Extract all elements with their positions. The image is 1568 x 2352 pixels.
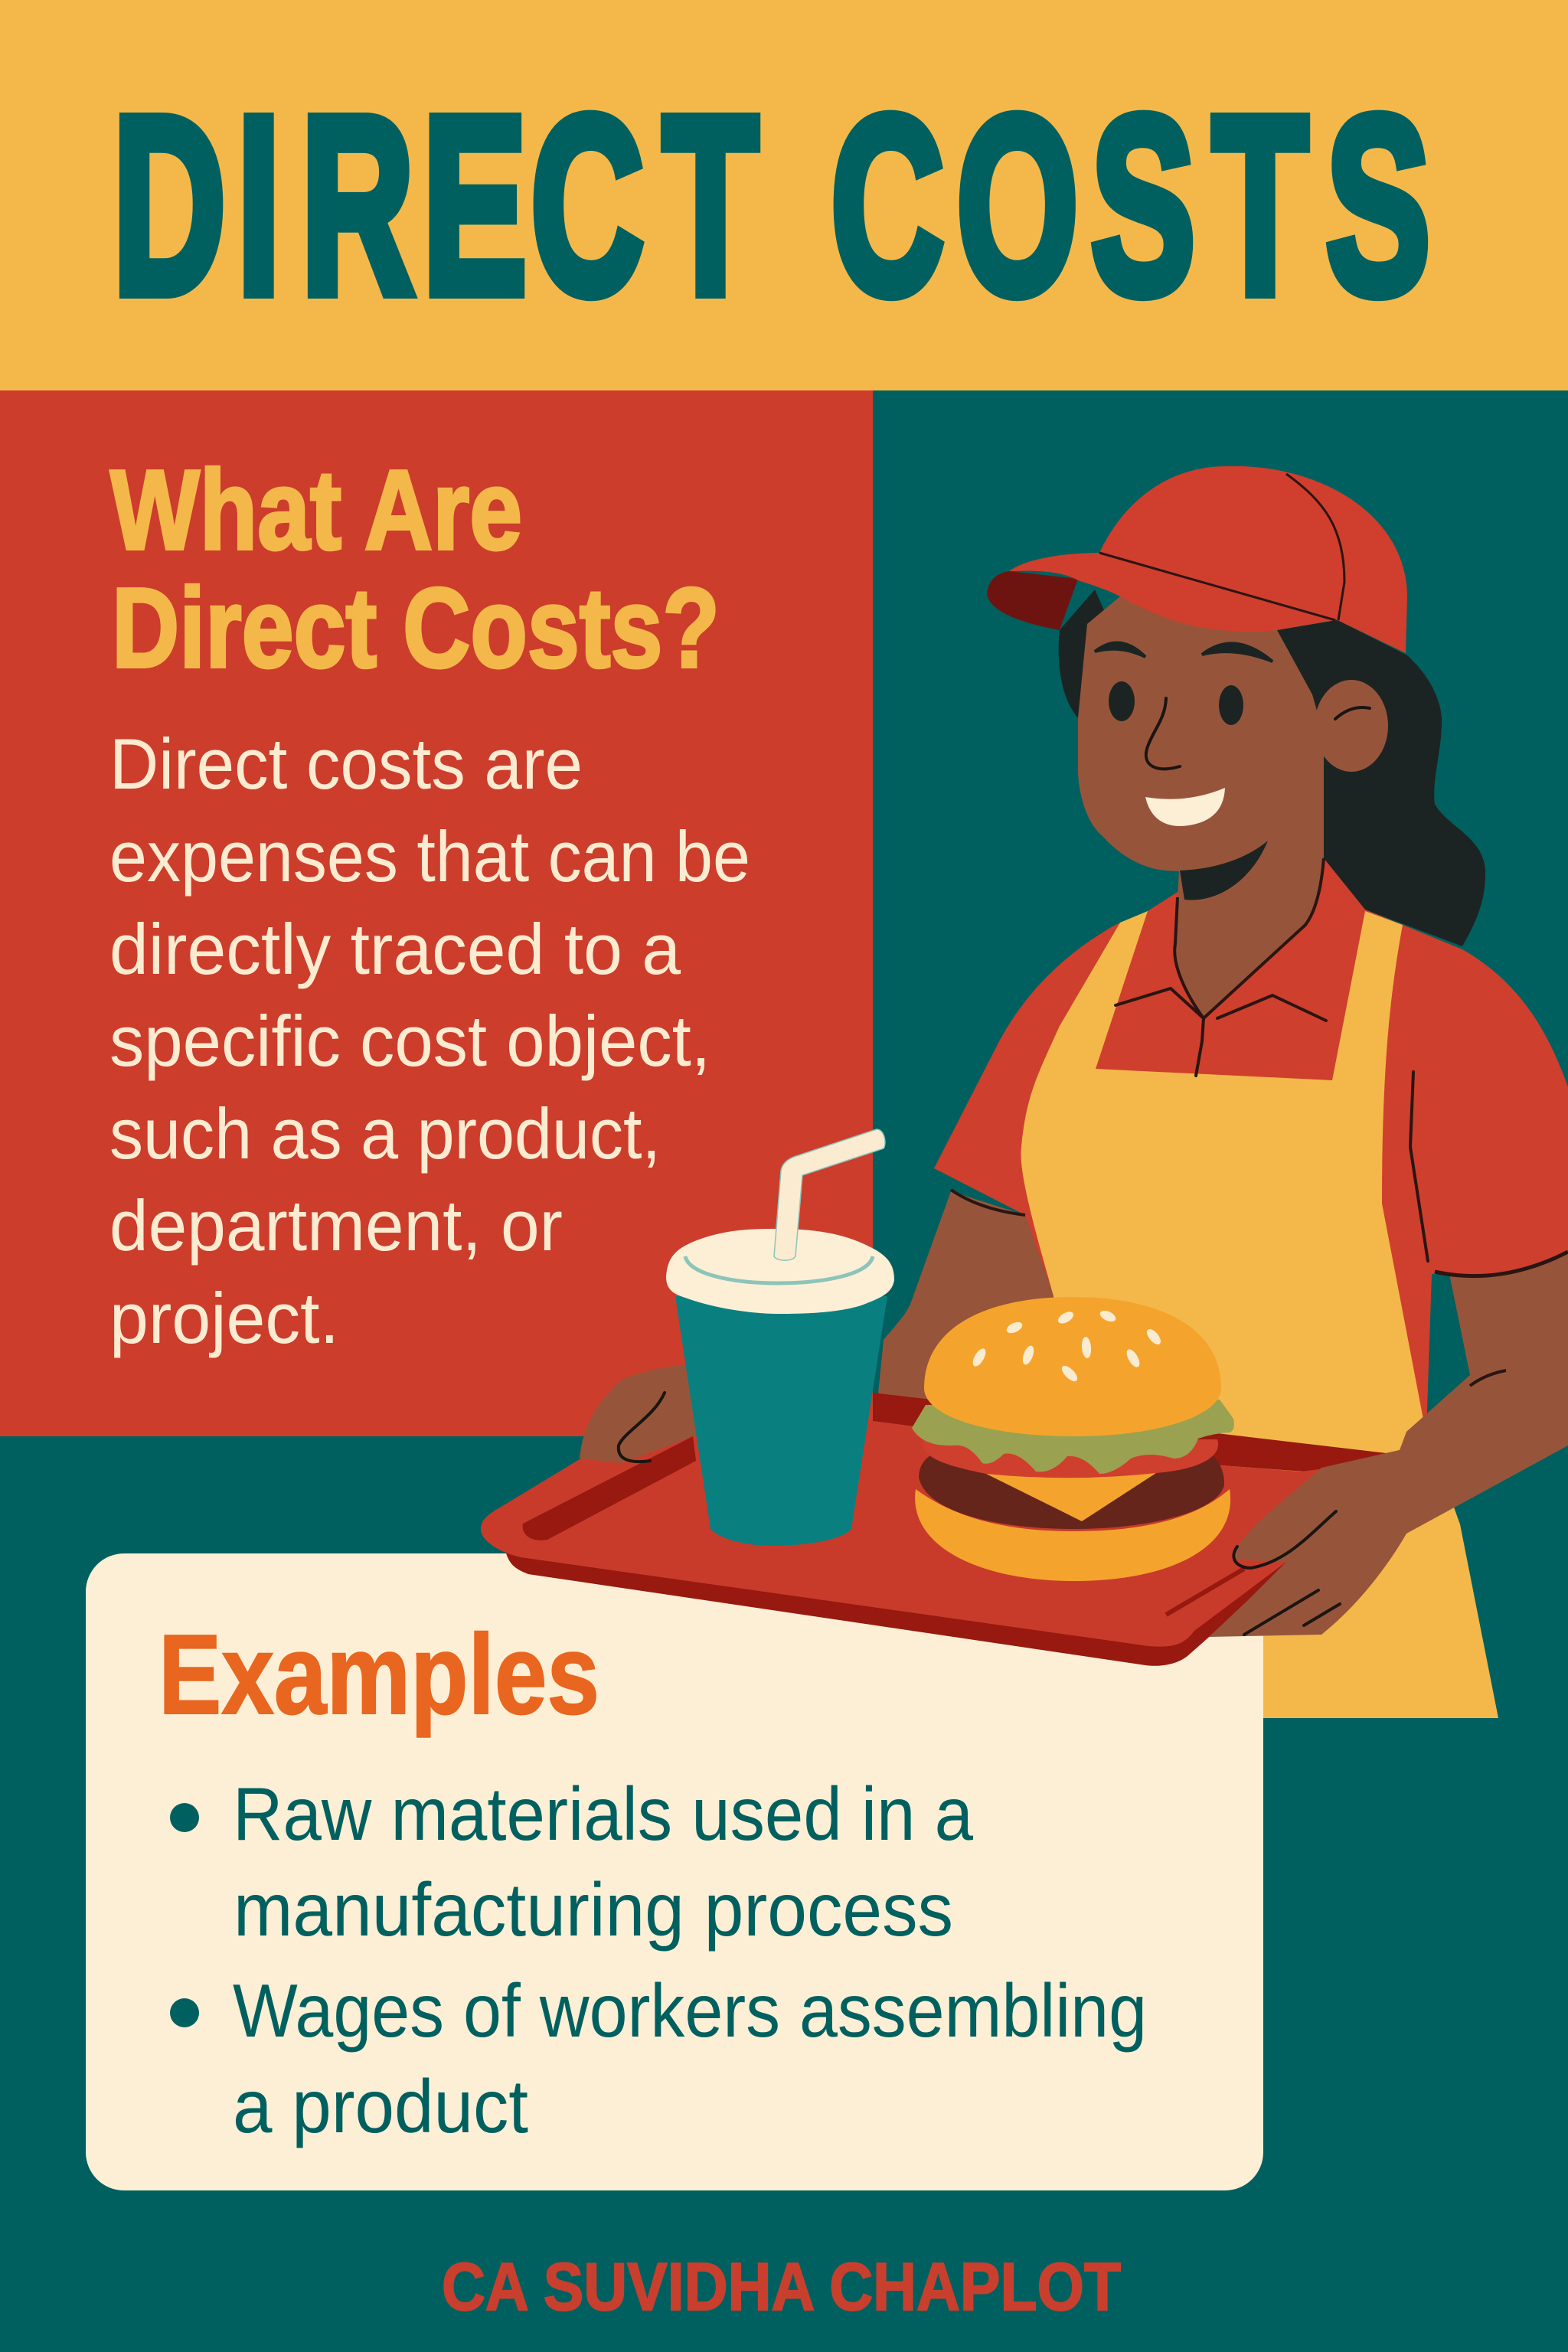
text block: definition: department, or	[109, 1185, 563, 1266]
heading: what are direct costs	[110, 447, 720, 691]
top bun	[924, 1297, 1221, 1436]
tray surface	[481, 1409, 1386, 1647]
straw	[774, 1129, 885, 1260]
smile	[1145, 788, 1225, 826]
shirt	[934, 858, 1568, 1455]
tray lip	[505, 1531, 1294, 1666]
face	[1078, 596, 1324, 871]
list item: wages: a product	[233, 2064, 528, 2148]
text block: definition: Direct costs are	[109, 724, 583, 804]
cup	[666, 1129, 894, 1546]
text block: definition: such as a product,	[109, 1093, 661, 1174]
heading: what are direct costs: What Are	[110, 447, 522, 573]
shirt collar and seams	[1116, 988, 1428, 1261]
tray groove	[523, 1436, 696, 1540]
text block: definition: expenses that can be	[109, 816, 750, 897]
ear	[1315, 680, 1388, 772]
cup lid	[666, 1229, 894, 1314]
left hand	[580, 1362, 735, 1463]
apron	[1021, 911, 1498, 1718]
tray inner edge line	[1166, 1569, 1244, 1615]
eyes	[1109, 681, 1135, 721]
heading: examples: Examples	[158, 1612, 599, 1738]
left arm	[877, 1191, 1054, 1455]
text block: definition: project.	[109, 1278, 339, 1358]
illustration: tray with food	[481, 1129, 1439, 1666]
neck outline	[1174, 858, 1324, 1018]
illustration: woman upper body	[877, 466, 1568, 1718]
neck shadow	[1180, 841, 1268, 900]
neck	[1174, 766, 1324, 1018]
list item: raw materials: manufacturing process	[234, 1867, 953, 1952]
nose and ear line	[1146, 698, 1370, 769]
burger	[912, 1297, 1234, 1581]
right hand	[1209, 1439, 1439, 1637]
eyebrows	[1095, 643, 1145, 657]
hair	[1059, 590, 1485, 946]
list item: wages	[170, 1968, 1147, 2148]
tray rim back	[873, 1393, 1393, 1478]
tomato	[923, 1439, 1218, 1480]
text block: definition: specific cost object,	[109, 1001, 710, 1081]
panel: definition	[0, 390, 873, 1436]
list item: wages: Wages of workers assembling	[233, 1968, 1147, 2053]
text block: definition	[109, 724, 750, 1358]
panel: examples	[86, 1553, 1263, 2190]
patty	[919, 1447, 1224, 1529]
cheese	[986, 1473, 1156, 1521]
footer credit: CA SUVIDHA CHAPLOT	[442, 2249, 1121, 2324]
panel: title banner	[0, 0, 1568, 390]
bottom bun	[915, 1489, 1230, 1581]
list item: raw materials	[170, 1772, 973, 1952]
list item: raw materials: Raw materials used in a	[233, 1772, 973, 1856]
sesame seeds	[970, 1308, 1163, 1383]
right arm	[1321, 1252, 1568, 1534]
title: DIRECT COSTS	[113, 64, 1430, 347]
lettuce	[912, 1400, 1234, 1474]
heading: what are direct costs: Direct Costs?	[112, 565, 720, 691]
text block: definition: directly traced to a	[109, 909, 681, 989]
cap	[987, 466, 1407, 653]
